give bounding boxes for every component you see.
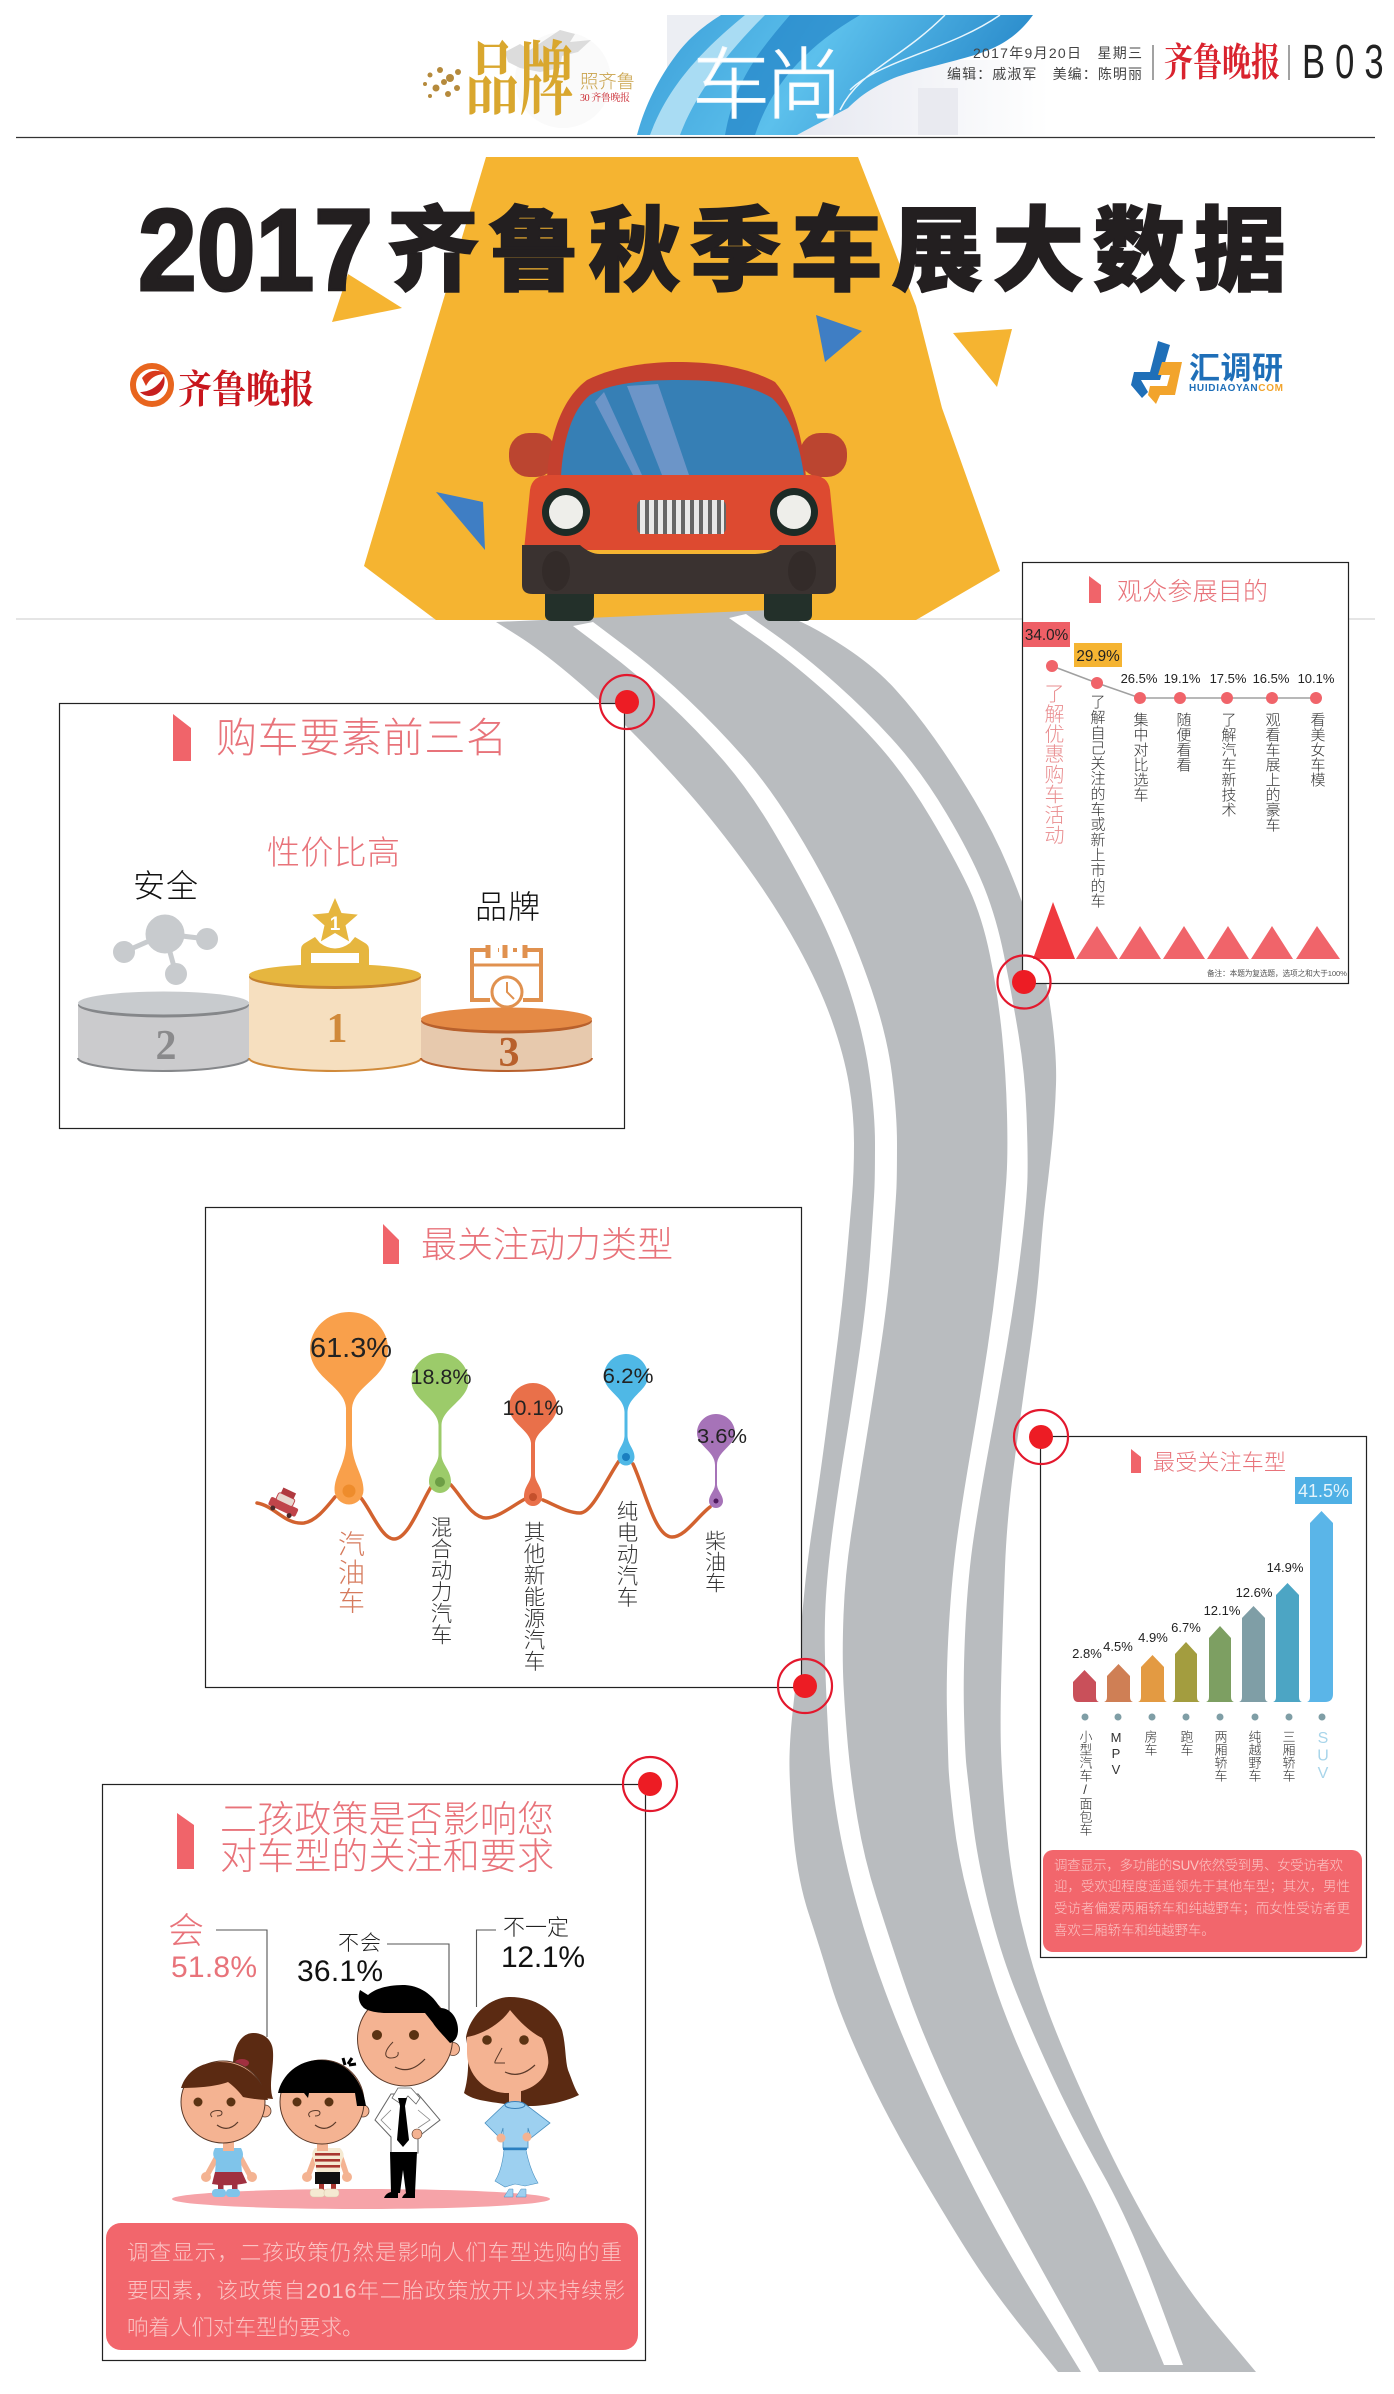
vertical model labels: SUV [1314, 1730, 1332, 1782]
marker: panel models [1014, 1410, 1068, 1464]
drop: other new energy [502, 1383, 564, 1672]
callout: policy finding: 调查显示，二孩政策仍然是影响人们车型选购的重 [127, 2241, 622, 2265]
panel: two-child policy [102, 1784, 646, 2360]
logo: Huidiaoyan: HUIDIAOYANCOM [1189, 383, 1283, 394]
figure: yes share [168, 1910, 267, 2037]
callout: model finding: 受访者偏爱两厢轿车和纯越野车；而女性受访者更 [1054, 1901, 1350, 1916]
vertical category labels: 观看车展上的豪车 [1264, 712, 1280, 832]
figure: no share: 不会 [338, 1932, 381, 1955]
drop: petrol: 汽油车 [334, 1530, 364, 1616]
percentage values: 19.1% [1164, 671, 1201, 686]
bar values: 12.6% [1236, 1585, 1273, 1600]
mirrors [509, 433, 847, 477]
figure: no share [297, 1932, 449, 2011]
figure: not sure share [476, 1915, 585, 2007]
podium: first place [249, 964, 421, 1071]
girl [181, 2033, 273, 2197]
vertical category labels: 了解自己关注的车或新上市的车 [1088, 694, 1106, 908]
icon: small car [266, 1485, 304, 1520]
value tag 29.9% [1074, 643, 1122, 667]
drop: hybrid [410, 1353, 472, 1645]
percentage values: 10.1% [1298, 671, 1335, 686]
family illustration [172, 1985, 579, 2209]
vertical category labels: 随便看看 [1174, 712, 1192, 772]
grille [637, 500, 726, 534]
issue date and editors: 编辑：戚淑军 美编：陈明丽 [947, 66, 1142, 82]
drop: diesel: 3.6% [697, 1426, 747, 1448]
podium: first place: 1 [326, 1006, 348, 1052]
value tag 29.9%: 29.9% [1076, 648, 1120, 665]
drop: diesel [697, 1414, 747, 1593]
marker: panel two-child policy [623, 1757, 677, 1811]
yellow backdrop shape [364, 157, 1000, 620]
callout: model finding: 调查显示，多功能的SUV依然受到男、女受访者欢 [1054, 1858, 1343, 1873]
logo: Huidiaoyan: 汇调研 [1189, 351, 1283, 386]
bar chart [1073, 1511, 1333, 1702]
figure: not sure share: 不一定 [503, 1915, 569, 1940]
figure: yes share: 会 [168, 1910, 204, 1951]
drop: pure electric [602, 1354, 654, 1608]
car illustration [509, 362, 847, 621]
roof [547, 362, 806, 478]
logo: Qilu Evening News: 齐鲁晚报 [178, 368, 314, 412]
car body [524, 475, 836, 550]
vertical category labels: 看美女车模 [1308, 712, 1326, 787]
issue date and editors: 2017年9月20日 星期三 [973, 45, 1142, 61]
drop: hybrid: 混合动力汽车 [428, 1516, 452, 1645]
value tag 41.5%: 41.5% [1298, 1481, 1349, 1501]
vertical model labels: 三厢轿车 [1280, 1730, 1296, 1782]
heading [177, 1799, 554, 1877]
triangle bars [1033, 902, 1340, 959]
heading: 二孩政策是否影响您 [220, 1799, 554, 1840]
label: value for money: 性价比高 [267, 834, 400, 871]
bar values [1072, 1560, 1304, 1661]
icon: calendar clock [472, 945, 541, 1007]
podium: second place: 2 [156, 1023, 176, 1069]
logo: Huidiaoyan [1131, 341, 1283, 404]
percentage values [1121, 671, 1335, 686]
figure: no share: 36.1% [297, 1955, 383, 1988]
label: safety: 安全 [133, 868, 198, 904]
marker: panel power type [778, 1659, 832, 1713]
newspaper masthead [423, 15, 1394, 135]
drop: petrol: 61.3% [310, 1332, 392, 1363]
wave line [257, 1461, 710, 1539]
icon: trophy star: 1 [330, 914, 341, 935]
main title [138, 185, 1286, 315]
figure: yes share: 51.8% [171, 1951, 257, 1984]
page number: B03 [1302, 34, 1394, 88]
vertical model labels: 小型汽车/面包车 [1078, 1730, 1092, 1836]
logo: brand campaign: 30 齐鲁晚报 [580, 91, 630, 104]
vertical category labels [1041, 683, 1326, 908]
decorative triangles [332, 274, 1012, 550]
wheels [545, 585, 812, 621]
banner: fashion section [637, 15, 1049, 135]
vertical model labels: 纯越野车 [1246, 1730, 1262, 1782]
bar values: 2.8% [1072, 1646, 1102, 1661]
icon: trophy star [301, 898, 369, 965]
callout: model finding: 迎，受欢迎程度遥遥领先于其他车型；其次，男性 [1054, 1879, 1350, 1894]
percentage values: 16.5% [1253, 671, 1290, 686]
icon: molecule [114, 915, 218, 984]
bumper [522, 545, 836, 594]
bar values: 4.5% [1103, 1639, 1133, 1654]
drop: diesel: 柴油车 [702, 1530, 726, 1593]
heading: 对车型的关注和要求 [220, 1836, 554, 1877]
vertical model labels: MPV [1108, 1730, 1124, 1778]
issue date and editors [947, 45, 1142, 82]
panel: visitors' purpose [1022, 562, 1348, 984]
heading: 购车要素前三名 [216, 715, 507, 761]
newspaper name: 齐鲁晚报 [1164, 42, 1280, 85]
father [358, 1985, 460, 2198]
callout: model finding [1043, 1850, 1362, 1952]
vertical model labels [1078, 1730, 1332, 1836]
panel: most watched models [1040, 1436, 1366, 1958]
heading: 最受关注车型 [1153, 1450, 1286, 1475]
vertical model labels: 跑车 [1178, 1730, 1194, 1756]
drop: other new energy: 10.1% [502, 1397, 564, 1420]
main title: 2017 [138, 185, 373, 315]
vertical category labels: 了解汽车新技术 [1220, 712, 1236, 817]
marker: panel visitors' purpose [998, 956, 1050, 1008]
heading: 观众参展目的 [1117, 578, 1268, 606]
headlights [542, 488, 818, 536]
bullet dots [1082, 1714, 1326, 1720]
podium: third place: 3 [498, 1030, 520, 1076]
banner: fashion section: 车尚 [692, 41, 843, 129]
drop: pure electric: 6.2% [602, 1365, 654, 1388]
logo: brand campaign: 照齐鲁 [580, 71, 635, 92]
logo: brand campaign: 品牌 [465, 36, 574, 126]
line chart [1046, 660, 1322, 704]
windshield [561, 380, 804, 476]
callout: policy finding [106, 2223, 638, 2350]
callout: model finding: 喜欢三厢轿车和纯越野车。 [1054, 1923, 1215, 1938]
percentage values: 26.5% [1121, 671, 1158, 686]
road [496, 610, 1256, 2372]
panel: top three purchase factors [60, 704, 624, 1128]
label: brand: 品牌 [475, 889, 540, 925]
figure: not sure share: 12.1% [501, 1941, 585, 1974]
heading: 最关注动力类型 [421, 1224, 673, 1265]
podium: third place [421, 1008, 592, 1076]
boy [278, 2058, 369, 2197]
vertical category labels: 了解优惠购车活动 [1041, 683, 1064, 845]
bar values: 12.1% [1204, 1603, 1241, 1618]
value tag 41.5% [1295, 1477, 1352, 1504]
value tag 34.0%: 34.0% [1025, 627, 1069, 644]
bar values: 14.9% [1267, 1560, 1304, 1575]
vertical model labels: 房车 [1142, 1730, 1158, 1756]
bar values: 6.7% [1171, 1620, 1201, 1635]
mother [464, 1997, 579, 2197]
main title: 齐鲁秋季车展大数据 [387, 201, 1286, 303]
drop: petrol [310, 1312, 392, 1616]
drop: other new energy: 其他新能源汽车 [521, 1521, 545, 1672]
drop: pure electric: 纯电动汽车 [614, 1500, 638, 1608]
drop: hybrid: 18.8% [410, 1366, 472, 1389]
percentage values: 17.5% [1210, 671, 1247, 686]
callout: policy finding: 响着人们对车型的要求。 [127, 2316, 364, 2340]
podium: second place [78, 992, 249, 1071]
callout: policy finding: 要因素，该政策自2016年二胎政策放开以来持续影 [127, 2279, 625, 2303]
panel: power type [206, 1208, 802, 1688]
bar values: 4.9% [1138, 1630, 1168, 1645]
marker: panel purchase factors [600, 675, 654, 729]
footnote: 备注：本题为复选题，选项之和大于100% [1207, 968, 1347, 978]
logo: brand campaign [423, 30, 635, 128]
value tag 34.0% [1023, 622, 1070, 647]
vertical category labels: 集中对比选车 [1132, 712, 1148, 802]
vertical model labels: 两厢轿车 [1212, 1730, 1228, 1782]
